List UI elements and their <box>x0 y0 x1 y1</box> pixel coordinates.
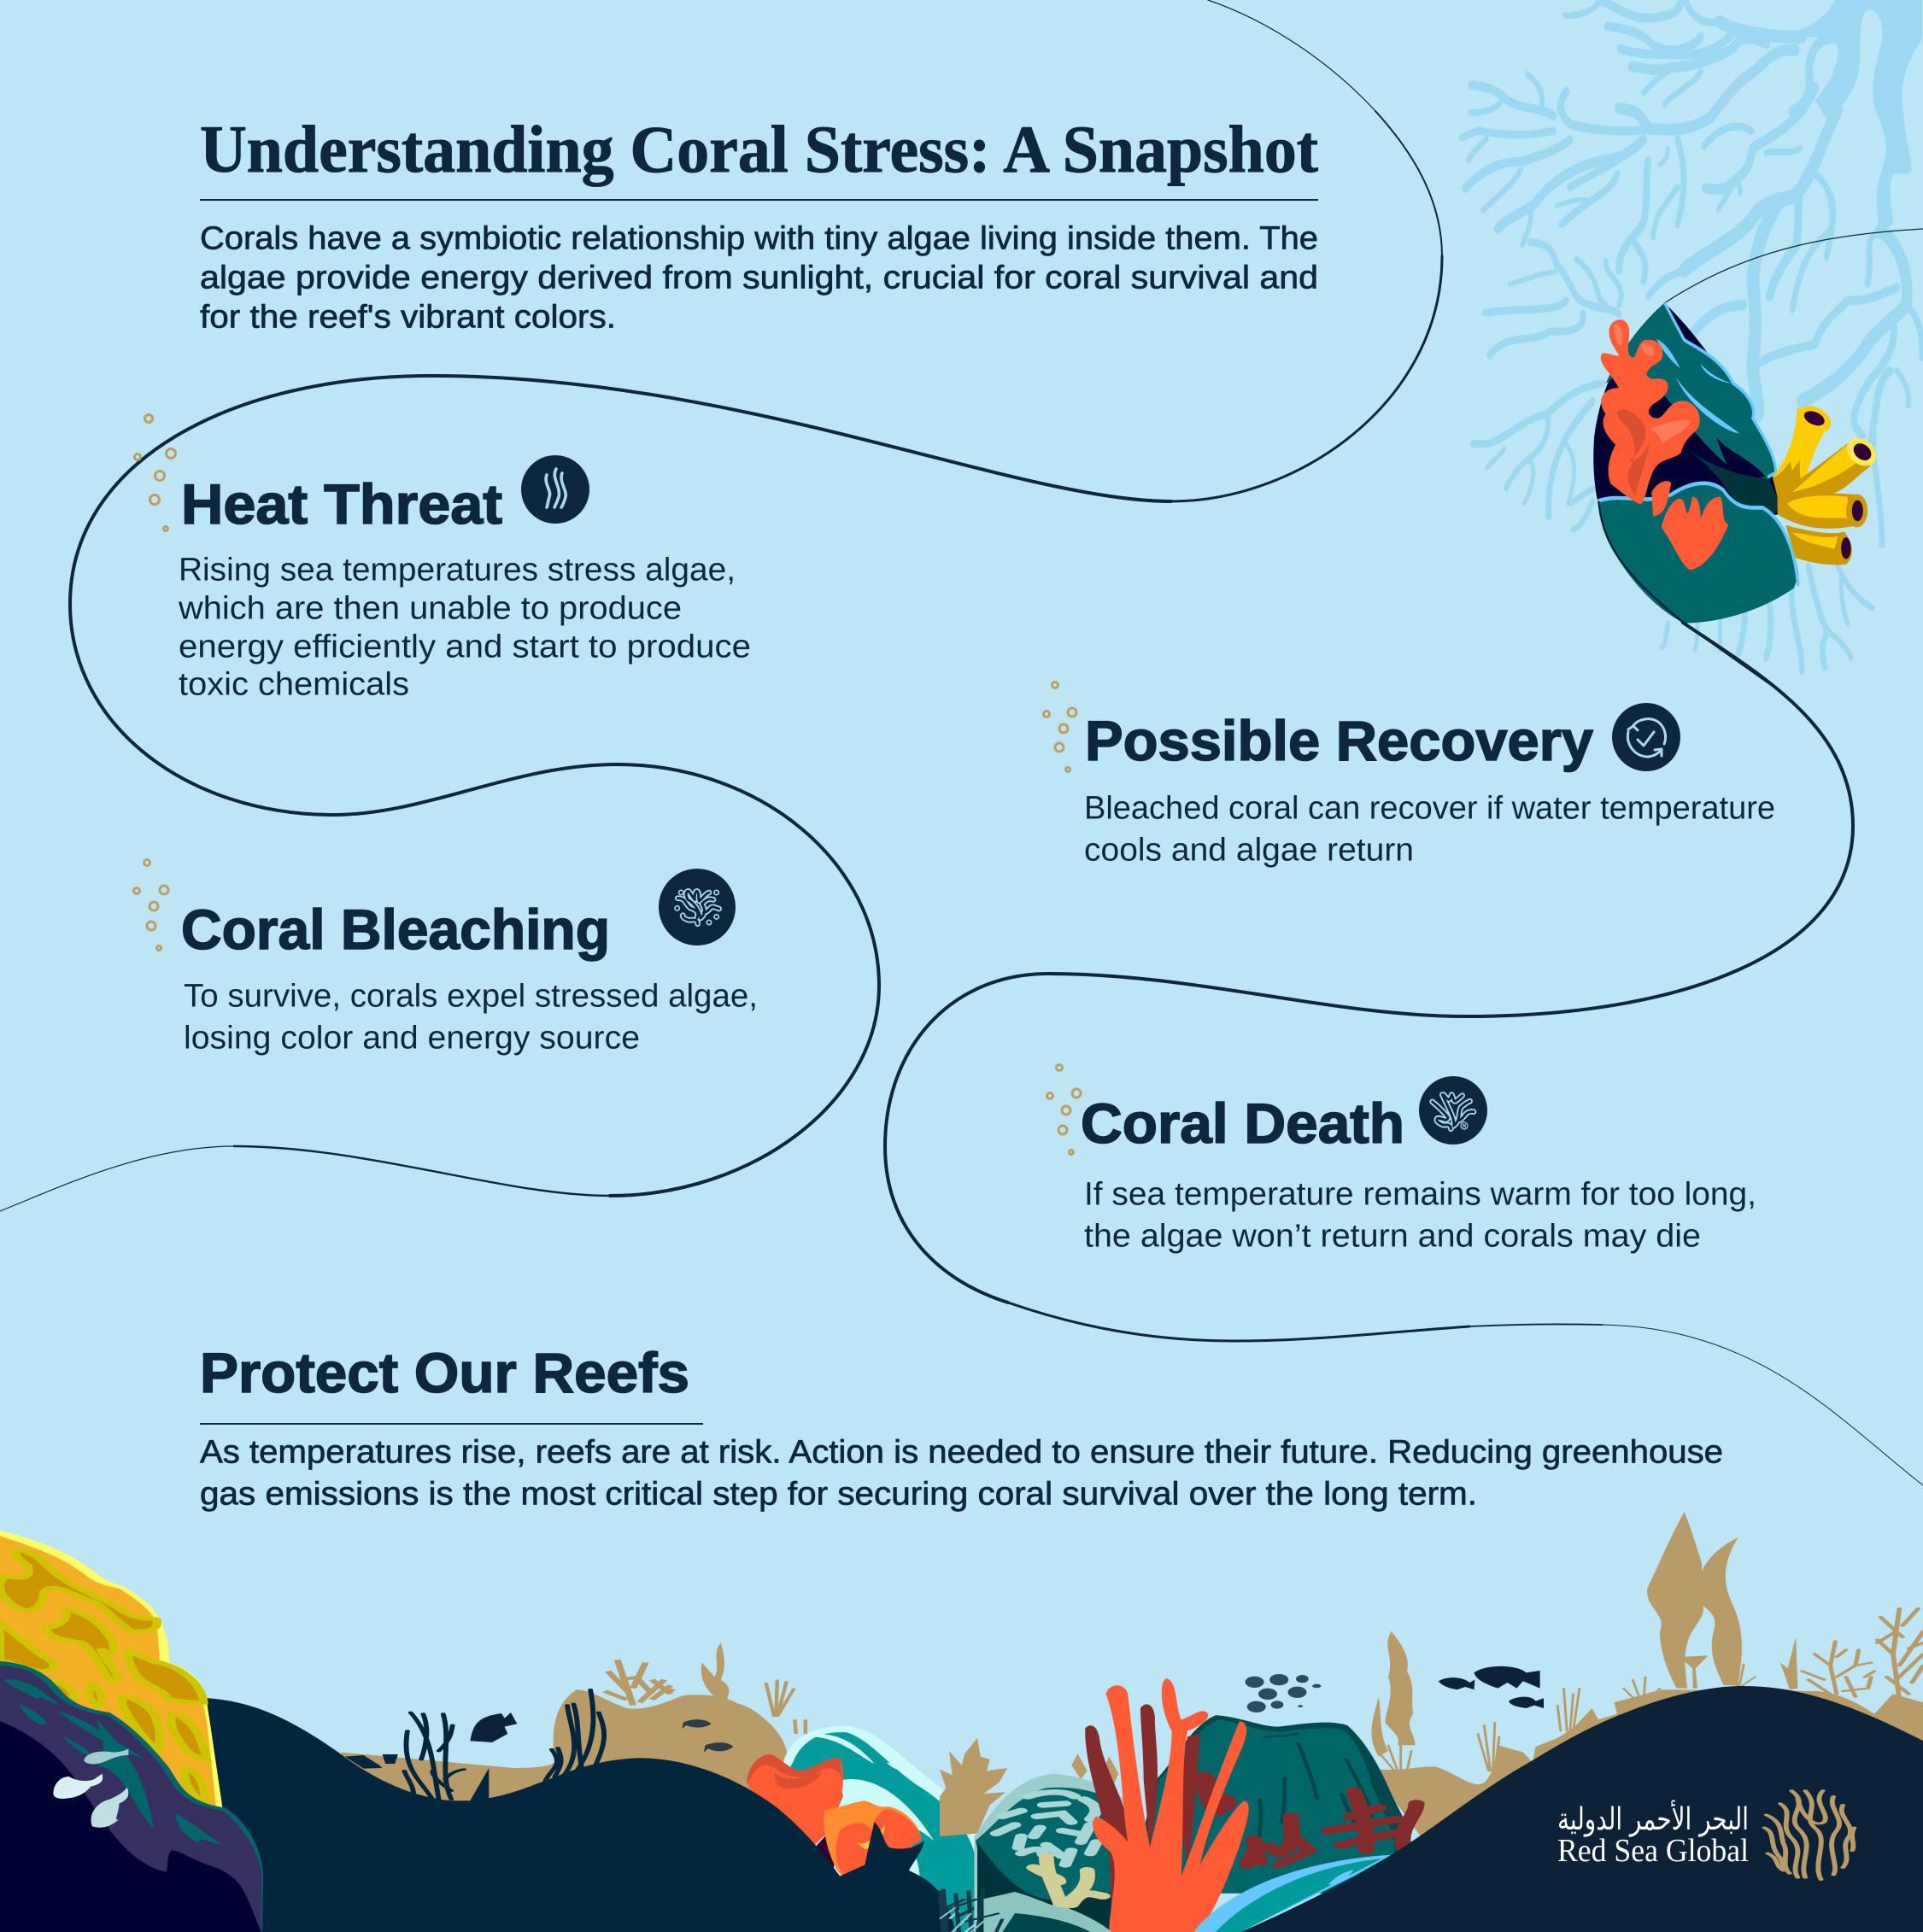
pale bush strokes <box>940 1907 987 1932</box>
body text: As temperatures rise, reefs are at risk. Action is needed to ensure their future. Reducing greenhouse <box>200 1435 1723 1471</box>
heading: Heat Threat <box>181 472 502 536</box>
dark fish over tan <box>345 1754 398 1769</box>
tan reef mound <box>314 1642 806 1836</box>
body text: gas emissions is the most critical step for securing coral survival over the long term. <box>200 1476 1477 1512</box>
panel: Coral Bleaching <box>133 859 758 1056</box>
body text: energy efficiently and start to produce <box>179 629 751 664</box>
yellow brain coral <box>0 1531 222 1865</box>
heading: Possible Recovery <box>1085 709 1593 772</box>
pale bush strokes <box>950 1911 982 1932</box>
flowing curve: right path <box>885 229 1923 1485</box>
coral branch background <box>1462 0 1922 671</box>
body text: To survive, corals expel stressed algae, <box>184 979 758 1015</box>
bubbles <box>1044 682 1076 772</box>
icon: recovery arrows <box>1612 703 1680 771</box>
logo mark <box>1764 1791 1854 1880</box>
body text: losing color and energy source <box>184 1020 640 1056</box>
panel: Possible Recovery <box>1044 682 1775 868</box>
big teal rock <box>1128 1715 1410 1894</box>
title: Understanding Coral Stress: A Snapshot <box>200 112 1318 186</box>
logo wordmark: البحر الأحمر الدولية <box>1557 1800 1749 1837</box>
panel: Coral Death <box>1047 1064 1756 1254</box>
fish on tan <box>682 1719 733 1753</box>
flowing curve: left path <box>0 0 1442 1211</box>
illustration: reef scene, left <box>0 1531 982 1932</box>
body text <box>1084 791 1775 868</box>
panel: Heat Threat <box>135 415 751 702</box>
intro text: algae provide energy derived from sunlight, crucial for coral survival and <box>200 260 1318 296</box>
bubbles <box>1047 1064 1081 1155</box>
dark seaweed bush <box>940 1888 1002 1932</box>
fish silhouette <box>470 1712 517 1742</box>
bubbles <box>135 415 176 531</box>
tan fans and branching coral <box>1379 1608 1923 1771</box>
pale rocks <box>983 1892 1112 1932</box>
brain coral <box>974 1774 1128 1932</box>
small orange coral <box>815 1800 922 1879</box>
navy hill with logo <box>1240 1686 1923 1932</box>
illustration: coral capsule <box>1593 303 1879 683</box>
purple rock <box>0 1661 263 1932</box>
dark seaweed <box>404 1689 604 1800</box>
heading: Coral Death <box>1081 1092 1404 1155</box>
body text: which are then unable to produce <box>178 591 682 627</box>
body text: If sea temperature remains warm for too long, <box>1084 1177 1756 1213</box>
body text: Bleached coral can recover if water temperature <box>1084 791 1775 827</box>
orange branching coral <box>1093 1678 1249 1932</box>
body text: cools and algae return <box>1084 832 1414 868</box>
body text <box>1084 1177 1756 1254</box>
illustration: reef scene, right <box>940 1512 1923 1932</box>
white fish <box>53 1748 128 1828</box>
body text <box>184 979 758 1056</box>
dark red crust coral <box>1247 1791 1416 1865</box>
title divider <box>200 199 1318 201</box>
teal wave coral <box>783 1726 982 1932</box>
heading divider <box>200 1423 703 1425</box>
bubbles <box>133 859 168 950</box>
dark fish <box>1439 1666 1544 1708</box>
panel: Protect Our Reefs <box>200 1341 1723 1512</box>
icon: coral with bubbles <box>659 869 736 946</box>
navy hill <box>207 1698 956 1932</box>
logo wordmark <box>1557 1800 1749 1869</box>
blue shell coral <box>1193 1855 1392 1932</box>
intro text: Corals have a symbiotic relationship with tiny algae living inside them. The <box>200 220 1318 256</box>
logo wordmark: Red Sea Global <box>1557 1833 1749 1869</box>
intro text <box>200 220 1318 335</box>
body text <box>178 552 751 702</box>
heading: Coral Bleaching <box>181 898 610 961</box>
body text: the algae won’t return and corals may die <box>1084 1218 1701 1254</box>
icon: heat waves <box>521 455 589 524</box>
heading: Protect Our Reefs <box>200 1341 689 1404</box>
cream coral <box>1034 1856 1103 1911</box>
body text: Rising sea temperatures stress algae, <box>179 552 736 588</box>
intro text: for the reef's vibrant colors. <box>200 299 616 335</box>
fish school <box>1246 1674 1321 1712</box>
dark bush <box>943 1889 982 1932</box>
orange tulip coral <box>747 1754 843 1845</box>
dark red branches <box>1085 1704 1236 1932</box>
body text <box>200 1435 1723 1512</box>
body text: toxic chemicals <box>179 666 409 702</box>
icon: dead coral <box>1419 1076 1487 1145</box>
tan reef backdrop <box>940 1512 1923 1865</box>
